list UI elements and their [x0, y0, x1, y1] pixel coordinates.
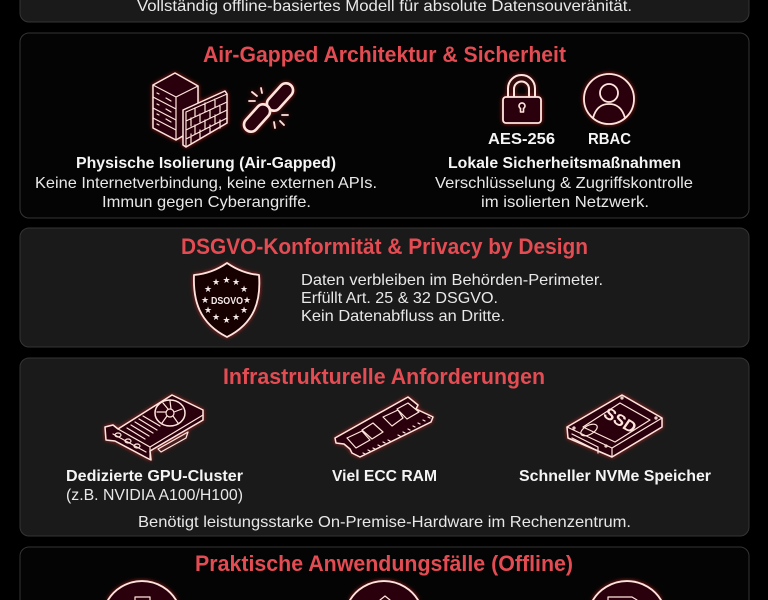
- icon: DSGVO shield: ★: [232, 277, 240, 287]
- icon: DSGVO shield: ★: [212, 312, 220, 322]
- label: RBAC: RBAC: [588, 131, 631, 148]
- text block: GDPR details: Erfüllt Art. 25 & 32 DSGVO.: [301, 290, 498, 307]
- icon: DSGVO shield: DSOVO: [211, 296, 243, 307]
- icon: use case building: [350, 581, 418, 600]
- infrastructure note: Benötigt leistungsstarke On-Premise-Hardware im Rechenzentrum.: [138, 514, 631, 531]
- text block: local security: [435, 155, 693, 211]
- icon: server and firewall: [153, 73, 227, 147]
- icon: DSGVO shield: [194, 263, 259, 337]
- panel: GDPR: [20, 228, 749, 347]
- icon: use case document: [108, 581, 176, 600]
- text block: local security: Verschlüsselung & Zugriffskontrolle: [435, 175, 693, 192]
- icon: DSGVO shield: ★: [232, 312, 240, 322]
- text block: physical isolation: Keine Internetverbindung, keine externen APIs.: [35, 175, 377, 192]
- icon: RAM module: [335, 397, 433, 457]
- icon: SSD drive: [567, 395, 662, 457]
- text block: physical isolation: Immun gegen Cyberangriffe.: [102, 194, 311, 211]
- icon: DSGVO shield: ★: [201, 295, 209, 305]
- icon: DSGVO shield: ★: [243, 295, 251, 305]
- text block: GDPR details: Kein Datenabfluss an Dritte.: [301, 308, 505, 325]
- heading: infrastructure: Infrastrukturelle Anforderungen: [223, 364, 545, 389]
- panel: intro: [20, 0, 749, 22]
- text block: physical isolation: [35, 155, 377, 211]
- text block: local security: im isolierten Netzwerk.: [481, 194, 649, 211]
- heading: GDPR: DSGVO-Konformität & Privacy by Design: [181, 234, 588, 259]
- label: ECC RAM: Viel ECC RAM: [332, 468, 437, 485]
- text block: GDPR details: Daten verbleiben im Behörden-Perimeter.: [301, 272, 603, 289]
- icon: use case file: [593, 581, 661, 600]
- icon: DSGVO shield: ★: [204, 305, 212, 315]
- text block: GDPR details: [301, 272, 603, 325]
- icon: DSGVO shield: ★: [222, 275, 231, 285]
- label: GPU cluster: (z.B. NVIDIA A100/H100): [66, 487, 243, 504]
- icon: GPU card: [105, 395, 203, 460]
- heading: air-gapped: Air-Gapped Architektur & Sicherheit: [203, 42, 567, 67]
- icon: broken chain link: [241, 80, 296, 135]
- icon: SSD drive: SSD: [600, 404, 640, 437]
- heading: use cases: Praktische Anwendungsfälle (Offline): [195, 551, 573, 576]
- icon: DSGVO shield: ★: [240, 284, 248, 294]
- icon: DSGVO shield: ★: [240, 305, 248, 315]
- icon: user circle: [584, 74, 634, 124]
- icon: DSGVO shield: ★: [204, 284, 212, 294]
- label: GPU cluster: [66, 468, 243, 504]
- label: GPU cluster: Dedizierte GPU-Cluster: [66, 468, 243, 485]
- label: AES-256: AES-256: [488, 131, 555, 148]
- icon: DSGVO shield: ★: [212, 277, 220, 287]
- panel: infrastructure: [20, 358, 749, 536]
- text block: local security: Lokale Sicherheitsmaßnahmen: [448, 155, 681, 172]
- text block: physical isolation: Physische Isolierung (Air-Gapped): [76, 155, 336, 172]
- icon: padlock: [503, 75, 541, 123]
- panel: use cases: [20, 547, 749, 600]
- label: NVMe storage: Schneller NVMe Speicher: [519, 468, 711, 485]
- icon: DSGVO shield: ★: [222, 315, 231, 325]
- panel: air-gapped architecture: [20, 33, 749, 218]
